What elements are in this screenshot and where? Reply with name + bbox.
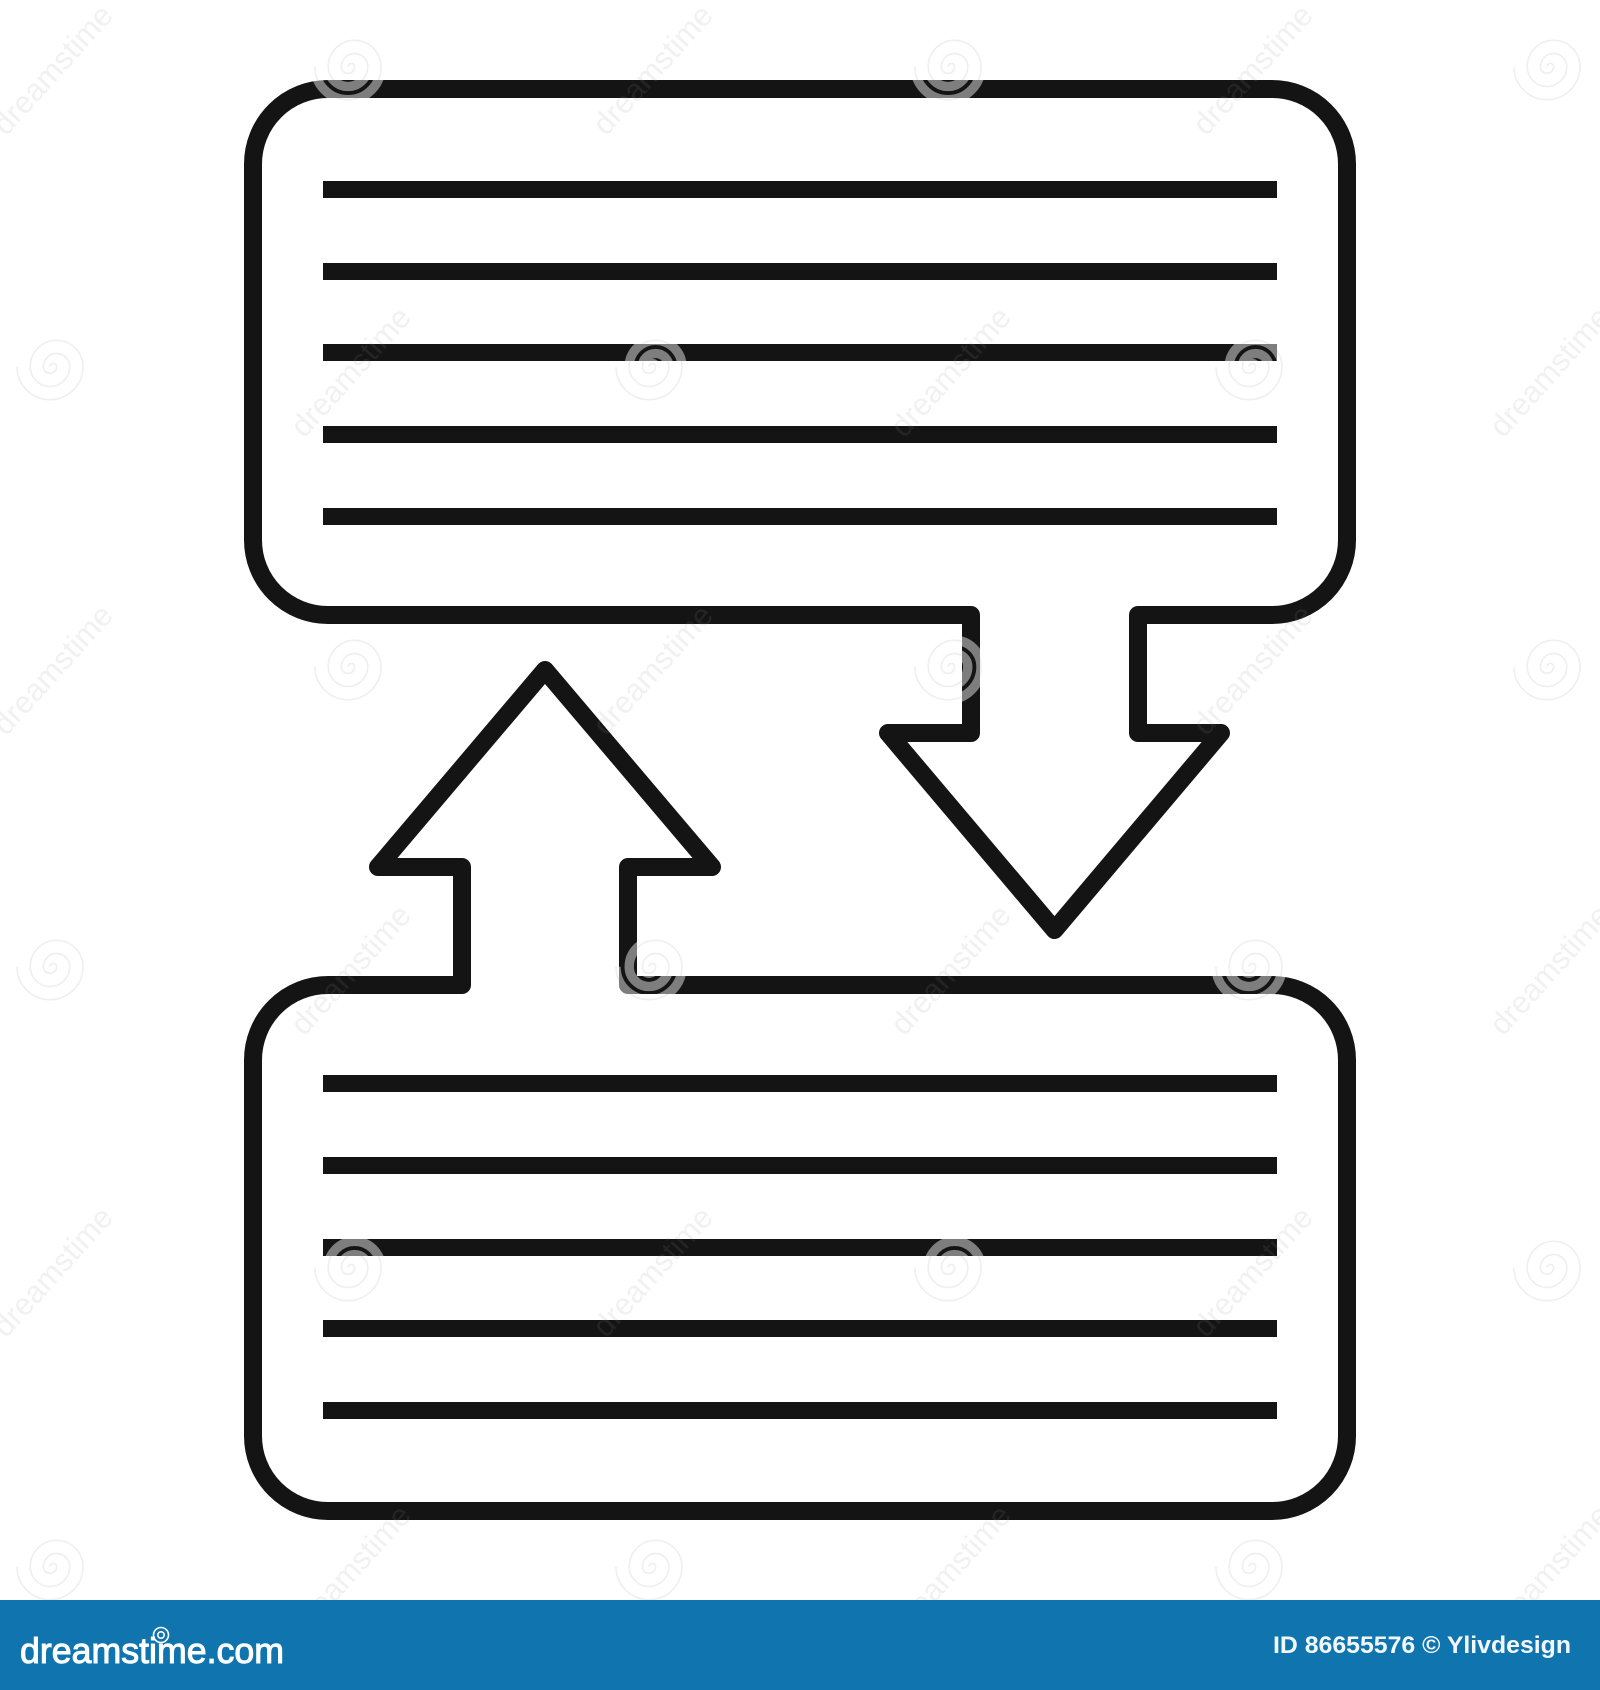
panel: bottom text box with up arrow [253,670,1347,1511]
image id and credit: ID 86655576 © Ylivdesign [1273,1632,1571,1659]
panel: top text box with down arrow [253,89,1347,930]
watermark text: dreamstime [585,0,720,142]
watermark text: dreamstime [283,898,418,1042]
watermark text: dreamstime [283,300,418,444]
watermark text: dreamstime [1185,0,1320,142]
top box outline with down arrow [253,89,1347,930]
watermark text: dreamstime [1185,1200,1320,1344]
bottom box outline with up arrow [253,670,1347,1511]
watermark text: dreamstime [585,1200,720,1344]
watermark text: dreamstime [883,300,1018,444]
bottom box text lines [323,1075,1277,1419]
footer band [0,1600,1600,1690]
watermark text: dreamstime [585,598,720,742]
icon: logo spiral [154,1628,168,1642]
watermark text: dreamstime [1185,598,1320,742]
watermark text: dreamstime [883,898,1018,1042]
watermark text: dreamstime [283,1498,418,1642]
watermark text: dreamstime [883,1498,1018,1642]
footer logo text: dreamstime.com [20,1630,284,1671]
top box text lines [323,181,1277,525]
